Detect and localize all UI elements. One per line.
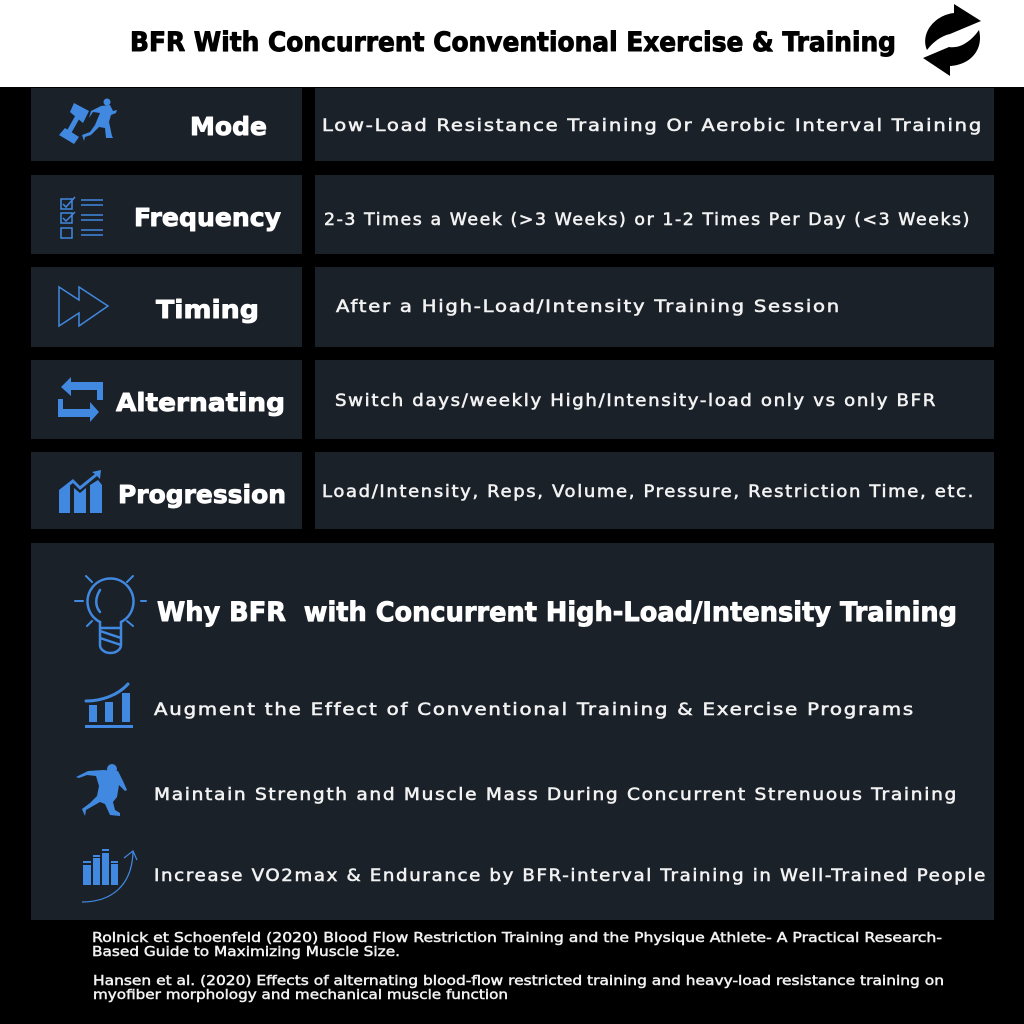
references bbox=[92, 931, 944, 1003]
icon: checklist bbox=[61, 197, 103, 238]
icon: light bulb bbox=[75, 576, 146, 653]
icon: bars with rising arrow bbox=[82, 849, 137, 902]
label: frequency: Frequency bbox=[134, 203, 281, 232]
text: mode detail: Low-Load Resistance Training Or Aerobic Interval Training bbox=[322, 116, 983, 135]
icon: refresh arrows bbox=[923, 4, 981, 76]
icon: swap arrows bbox=[58, 377, 103, 422]
panel: timing bbox=[31, 267, 994, 347]
panel: alternating bbox=[31, 360, 994, 439]
header band bbox=[0, 0, 1024, 87]
references: Based Guide to Maximizing Muscle Size. bbox=[92, 945, 400, 960]
references: myofiber morphology and mechanical muscle function bbox=[93, 988, 508, 1003]
icon: rising chart bbox=[59, 470, 102, 513]
title: BFR With Concurrent Conventional Exercise & Training bbox=[130, 27, 896, 58]
text: maintain: Maintain Strength and Muscle Mass During Concurrent Strenuous Training bbox=[154, 785, 958, 804]
panel: why BFR bbox=[31, 543, 994, 920]
text: progression detail: Load/Intensity, Reps, Volume, Pressure, Restriction Time, etc. bbox=[322, 482, 975, 501]
text: increase: Increase VO2max & Endurance by BFR-interval Training in Well-Trained People bbox=[154, 866, 987, 885]
references: Hansen et al. (2020) Effects of alternating blood-flow restricted training and heavy-load resistance training on bbox=[93, 974, 944, 989]
icon: barbell and runner bbox=[59, 98, 117, 144]
label: alternating: Alternating bbox=[116, 388, 285, 417]
panel: progression bbox=[31, 452, 994, 529]
heading: why BFR: Why BFR with Concurrent High-Load/Intensity Training bbox=[157, 597, 957, 628]
text: alternating detail: Switch days/weekly High/Intensity-load only vs only BFR bbox=[335, 391, 937, 410]
label: timing: Timing bbox=[156, 295, 259, 324]
text: augment: Augment the Effect of Conventional Training & Exercise Programs bbox=[154, 700, 915, 719]
icon: fast forward bbox=[59, 287, 108, 326]
references: Rolnick et Schoenfeld (2020) Blood Flow Restriction Training and the Physique Athlete- A Practical Research- bbox=[92, 931, 942, 946]
label: progression: Progression bbox=[118, 480, 286, 509]
panel: mode bbox=[31, 88, 994, 161]
icon: bar chart with curve bbox=[85, 684, 133, 728]
text: timing detail: After a High-Load/Intensity Training Session bbox=[336, 297, 841, 316]
panel: frequency bbox=[31, 175, 994, 254]
icon: sprinter bbox=[76, 764, 127, 816]
text: frequency detail: 2-3 Times a Week (>3 Weeks) or 1-2 Times Per Day (<3 Weeks) bbox=[324, 210, 971, 229]
label: mode: Mode bbox=[190, 112, 267, 141]
